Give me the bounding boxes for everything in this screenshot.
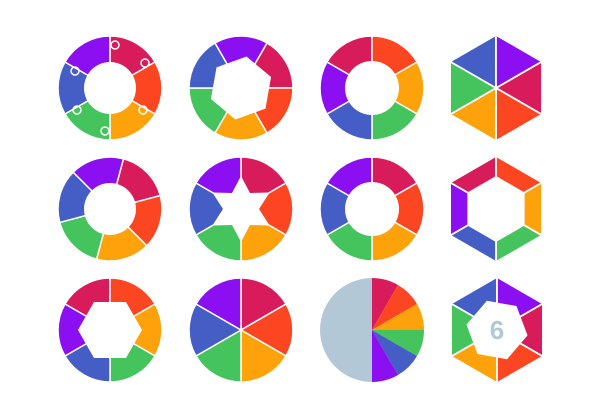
icon: arrow ring — [46, 145, 174, 273]
icon: full pie — [189, 278, 293, 382]
icon: rounded segment ring — [301, 17, 443, 159]
icon: plain donut — [320, 157, 424, 261]
icon: hexagon with number 6 — [452, 278, 542, 382]
icon: star hole circle — [189, 157, 293, 261]
icon: aperture hexagon hole — [39, 259, 181, 401]
icon: hexagon ring — [450, 157, 542, 261]
icon: pinwheel hexagon — [450, 36, 542, 140]
number 6: 6 — [490, 315, 504, 345]
icon: half grey pie chart — [320, 278, 424, 382]
icon: puzzle ring — [58, 36, 162, 140]
icon: aperture circle — [170, 17, 312, 159]
